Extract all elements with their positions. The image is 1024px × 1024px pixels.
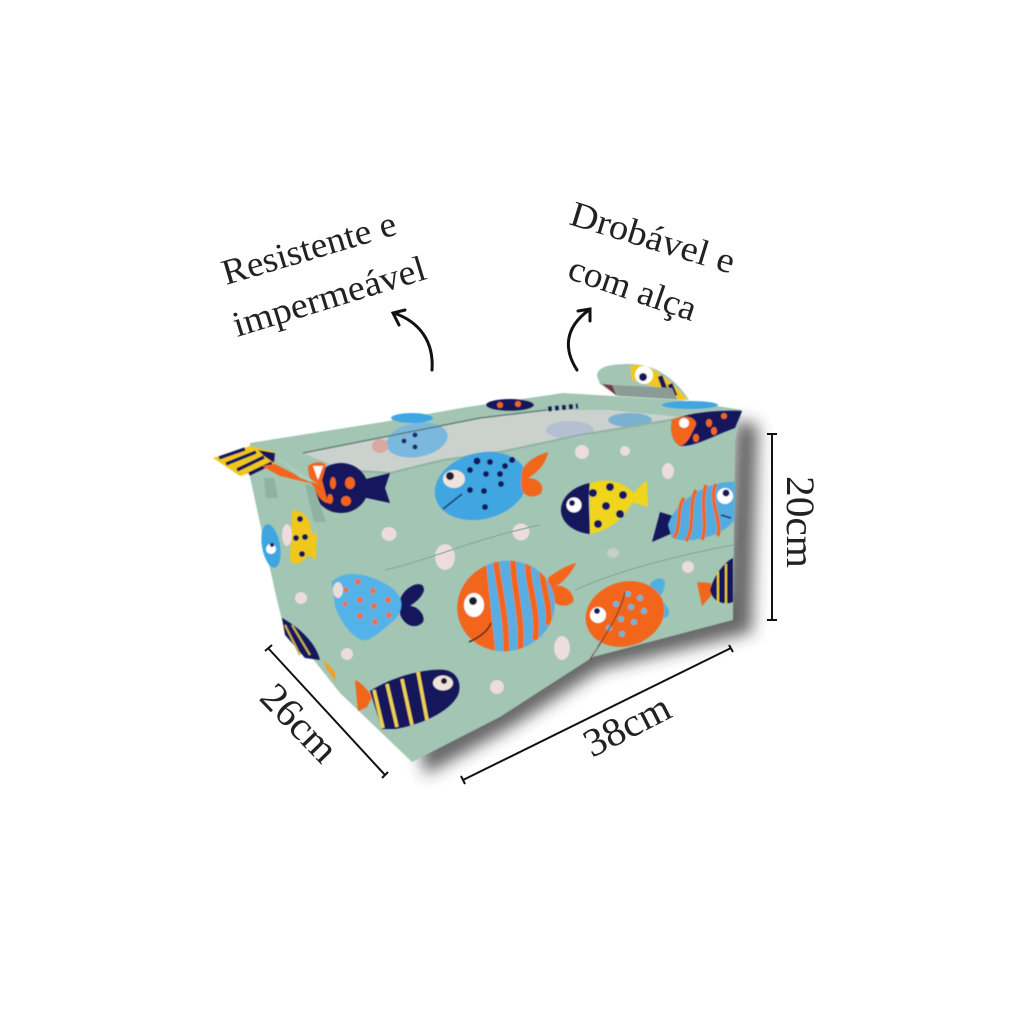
handle: right (597, 364, 689, 400)
basket body (250, 393, 742, 762)
annotation: resistente e impermeável: impermeável (228, 248, 431, 345)
basket drop shadow (420, 420, 758, 775)
dimension: width: 38cm (576, 684, 678, 766)
fish: orange with blue tail (577, 571, 673, 660)
fish: corner navy orange right (671, 411, 742, 446)
fabric fold lines (385, 525, 733, 665)
bubbles (282, 445, 694, 694)
annotation: resistente e impermeável: Resistente e (217, 203, 401, 293)
fish: navy striped bottom (355, 670, 459, 729)
annotation: resistente e impermeável (217, 203, 431, 345)
fish: striped blue right (652, 482, 735, 542)
dimension: height: 20cm (778, 476, 823, 568)
dimension: depth (252, 645, 388, 778)
handle ties on left corner (264, 455, 326, 522)
basket interior (303, 410, 690, 473)
dimension: depth: 26cm (252, 674, 348, 771)
fish: small navy at right edge (697, 558, 733, 606)
annotation: dobrável e com alça (563, 193, 740, 329)
handle: left yellow striped (213, 446, 314, 484)
rim folds (345, 411, 735, 473)
fish: left yellow side (290, 510, 317, 564)
fish: yellow with navy head (561, 480, 648, 534)
dimension: width (461, 645, 733, 784)
arrow: left (393, 310, 432, 370)
interior printed fish (372, 399, 718, 462)
annotation: dobrável e com alça: Drobável e (566, 193, 740, 281)
fish: light blue with orange dots (332, 574, 424, 640)
fish: corner navy with orange dots (308, 462, 390, 513)
fish: dark side lower left (282, 618, 336, 682)
fish: large blue top (427, 442, 548, 530)
dimension: height (767, 434, 823, 620)
annotation: dobrável e com alça: com alça (563, 248, 702, 329)
fish: big orange striped (456, 560, 576, 652)
arrow: right (568, 309, 590, 370)
fish: left blue side (258, 523, 284, 569)
